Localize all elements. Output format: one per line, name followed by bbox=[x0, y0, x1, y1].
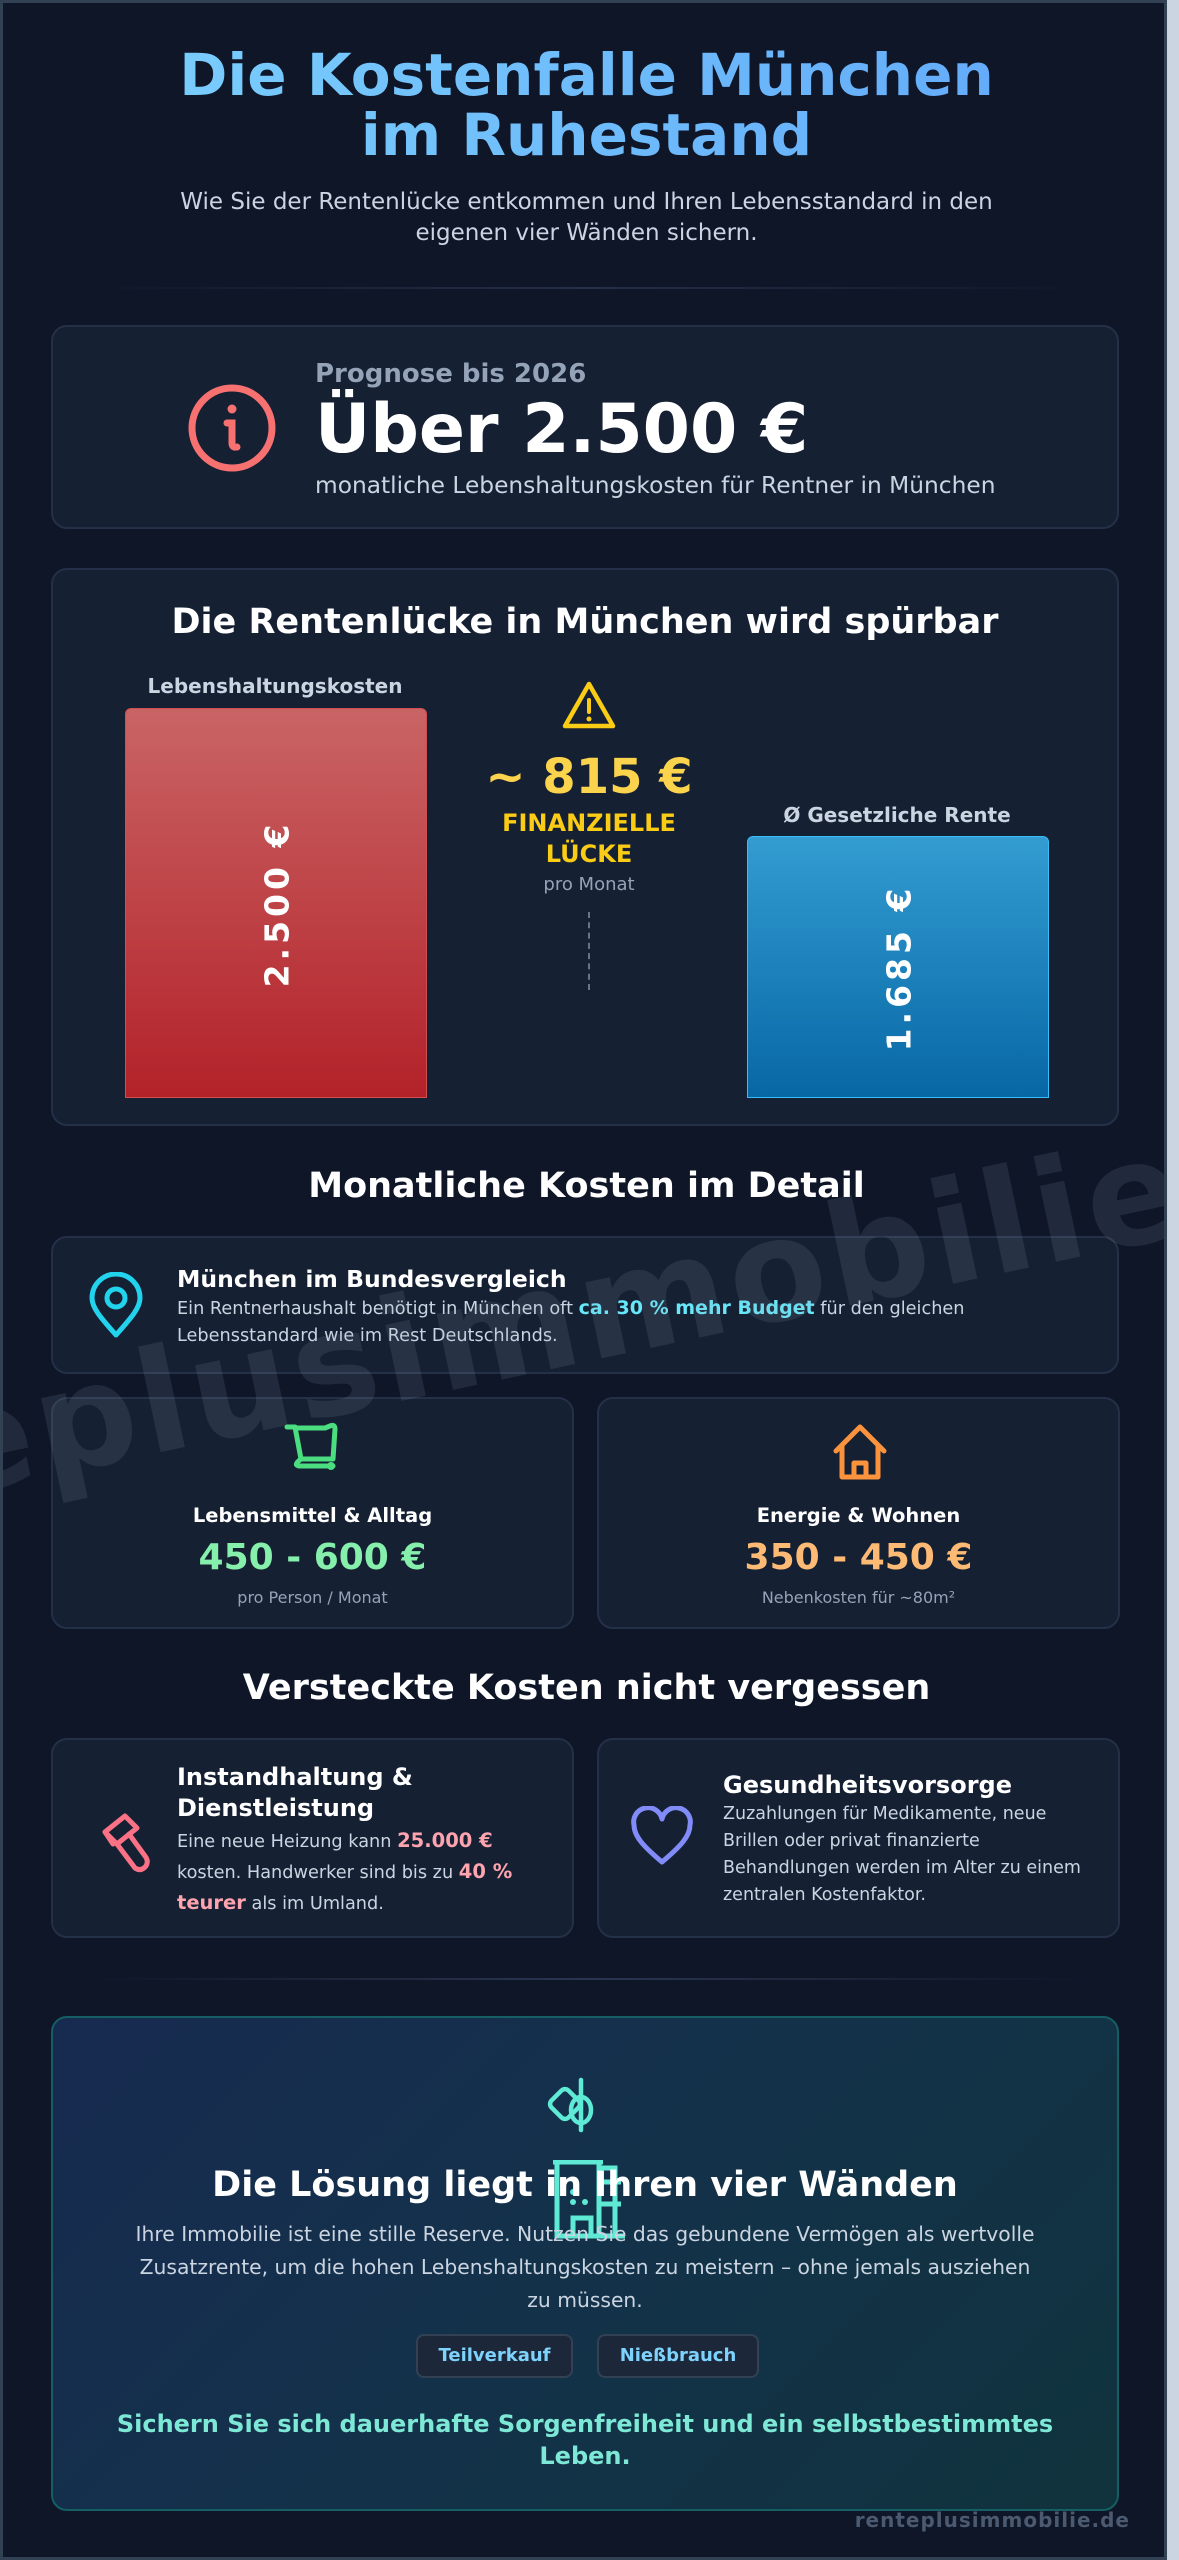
text: food: 450 - 600 € bbox=[199, 1537, 426, 1578]
button: Teilverkauf: Teilverkauf bbox=[438, 2345, 551, 2366]
heading: solution: Die Lösung liegt in Ihren vier Wänden bbox=[212, 2165, 958, 2205]
bar: cost: 2.500 € bbox=[258, 821, 296, 987]
text: maintenance: Eine neue Heizung kann 25.000 € kosten. Handwerker sind bis zu 40 % teurer als im Umland. bbox=[177, 1829, 512, 1914]
icon: building bbox=[553, 2160, 625, 2238]
text: maintenance bbox=[177, 1763, 512, 1914]
panel: solution bbox=[51, 2016, 1119, 2511]
text: energy: 350 - 450 € bbox=[745, 1537, 972, 1578]
callout: gap: ~ 815 € bbox=[485, 749, 693, 805]
bar: cost bbox=[125, 708, 427, 1098]
text: energy bbox=[745, 1504, 972, 1607]
text: health: Zuzahlungen für Medikamente, neue Brillen oder privat finanzierte Behandlungen werden im Alter zu einem zentralen Kostenfaktor. bbox=[723, 1804, 1081, 1905]
title: im Ruhestand bbox=[361, 101, 812, 169]
label: cost: Lebenshaltungskosten bbox=[148, 674, 402, 698]
text: solution: Ihre Immobilie ist eine stille Reserve. Nutzen Sie das gebundene Vermögen als wertvolle Zusatzrente, um die hohen Lebenshaltungskosten zu meistern – ohne jemals ausziehen zu müssen. bbox=[136, 2222, 1034, 2312]
icon: heart bbox=[631, 1806, 693, 1865]
heading: details: Monatliche Kosten im Detail bbox=[308, 1166, 865, 1206]
title bbox=[3, 45, 1170, 165]
button: Nießbrauch: Nießbrauch bbox=[620, 2345, 736, 2366]
text: health: Gesundheitsvorsorge bbox=[723, 1771, 1012, 1799]
text: energy: Nebenkosten für ~80m² bbox=[762, 1588, 955, 1607]
text: food bbox=[193, 1504, 432, 1607]
text: energy: Energie & Wohnen bbox=[757, 1504, 960, 1527]
icon: house bbox=[834, 1424, 886, 1480]
text: forecast: Über 2.500 € bbox=[315, 390, 808, 469]
icon: warning bbox=[562, 682, 616, 728]
heading: Die Rentenlücke in München wird spürbar bbox=[172, 602, 998, 642]
icon: cart bbox=[284, 1422, 338, 1470]
text: forecast: monatliche Lebenshaltungskosten für Rentner in München bbox=[315, 472, 995, 499]
heading: hidden costs: Versteckte Kosten nicht vergessen bbox=[243, 1668, 930, 1708]
panel: forecast bbox=[51, 325, 1119, 529]
panel: health bbox=[597, 1738, 1120, 1938]
text: comparison bbox=[177, 1265, 965, 1346]
button: Teilverkauf bbox=[416, 2334, 573, 2378]
text: forecast: Prognose bis 2026 bbox=[315, 359, 586, 389]
callout: gap: pro Monat bbox=[543, 874, 635, 895]
callout: gap: FINANZIELLE bbox=[502, 809, 676, 837]
text: food: pro Person / Monat bbox=[237, 1588, 388, 1607]
panel: pension gap chart bbox=[51, 568, 1119, 1126]
text: comparison: Ein Rentnerhaushalt benötigt in München oft ca. 30 % mehr Budget für den gleichen Lebensstandard wie im Rest Deutschlands. bbox=[177, 1297, 965, 1346]
closing statement: Sichern Sie sich dauerhafte Sorgenfreiheit und ein selbstbestimmtes Leben. bbox=[117, 2410, 1053, 2470]
text: food: Lebensmittel & Alltag bbox=[193, 1504, 432, 1527]
panel: maintenance bbox=[51, 1738, 574, 1938]
callout: gap: LÜCKE bbox=[546, 840, 632, 868]
label: pension: Ø Gesetzliche Rente bbox=[783, 803, 1011, 827]
icon: pin bbox=[90, 1272, 142, 1338]
button: Nießbrauch bbox=[597, 2334, 759, 2378]
subtitle: Wie Sie der Rentenlücke entkommen und Ihren Lebensstandard in den eigenen vier Wänden sichern. bbox=[180, 189, 993, 246]
bar: pension: 1.685 € bbox=[880, 885, 918, 1051]
panel: food bbox=[51, 1397, 574, 1629]
text: comparison: München im Bundesvergleich bbox=[177, 1265, 567, 1293]
bar: pension bbox=[747, 836, 1049, 1098]
icon: tool bbox=[102, 1813, 150, 1872]
panel: comparison bbox=[51, 1236, 1119, 1374]
icon: info bbox=[188, 384, 276, 472]
panel: energy bbox=[597, 1397, 1120, 1629]
callout: gap bbox=[485, 749, 693, 895]
footer: brand: renteplusimmobilie.de bbox=[855, 2508, 1130, 2532]
text: maintenance: Instandhaltung & Dienstleistung bbox=[177, 1763, 413, 1822]
text: forecast bbox=[315, 359, 995, 499]
title: Die Kostenfalle München bbox=[179, 41, 994, 109]
icon: drop bbox=[548, 2078, 594, 2132]
